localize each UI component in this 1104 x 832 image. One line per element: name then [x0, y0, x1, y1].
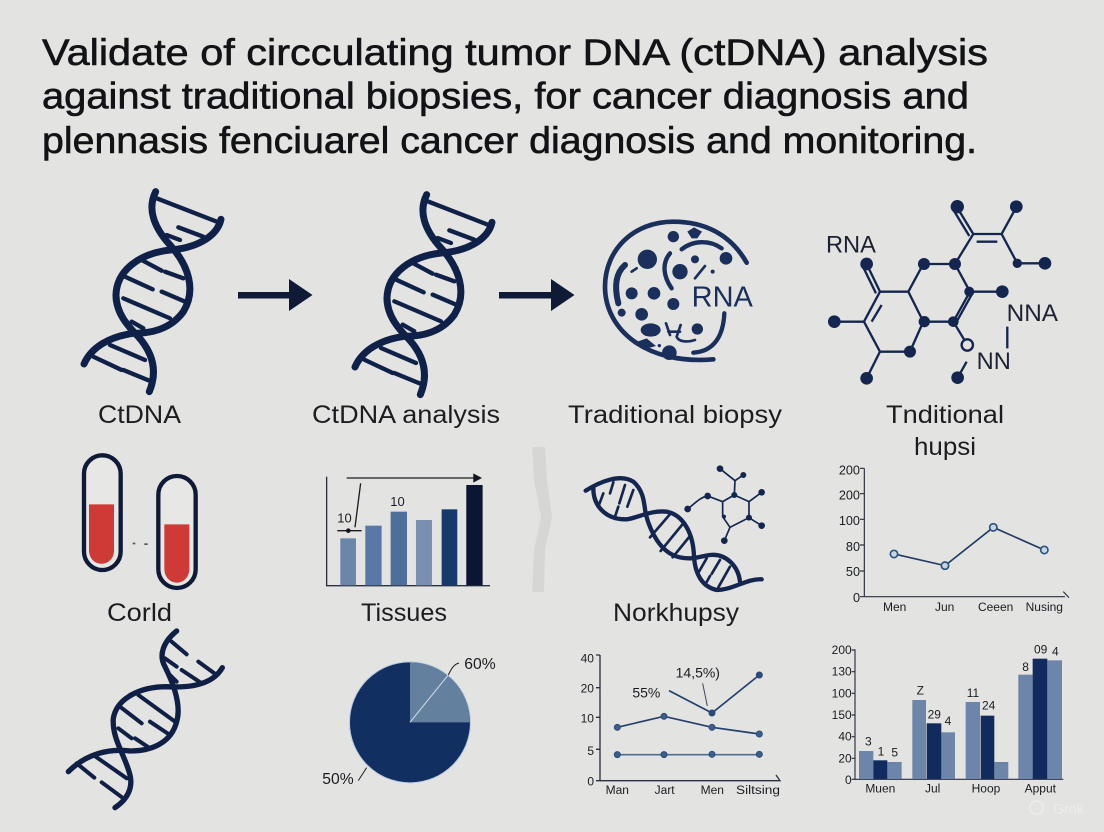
x labels: Jart [655, 783, 675, 797]
y labels: 5 [587, 744, 594, 758]
label: CtDNA: CtDNA [98, 401, 181, 429]
bar chart: tissues: 10 [390, 494, 405, 509]
y labels: 150 [832, 708, 852, 722]
y labels: 0 [845, 773, 852, 787]
y labels [581, 652, 594, 788]
series lines [617, 675, 759, 755]
y labels: 20 [838, 751, 852, 765]
axis labels: 0 [853, 591, 860, 605]
axis labels [839, 463, 860, 605]
y labels: 40 [581, 652, 594, 666]
data line [894, 527, 1044, 566]
bar chart: tissues: 10 [337, 511, 352, 526]
icon: blood tubes [84, 455, 196, 588]
pie chart [322, 656, 496, 788]
label: Corld: Corld [107, 599, 172, 627]
y labels: 200 [832, 643, 852, 657]
month labels: Nusing [1026, 600, 1063, 614]
label: Tnditional hupsi: Tnditional [886, 401, 1004, 429]
title [42, 32, 988, 161]
y labels: 0 [587, 774, 594, 788]
label: RNA: RNA [826, 233, 876, 259]
label: Norkhupsy: Norkhupsy [613, 599, 740, 627]
label: NN: NN [977, 349, 1011, 375]
month labels: Ceeen [978, 600, 1013, 614]
value labels [865, 643, 1059, 760]
line chart: multi series [581, 652, 780, 797]
value labels: Z [917, 684, 924, 698]
y labels: 40 [838, 730, 852, 744]
callout: 14,5%): 14,5%) [676, 664, 720, 680]
label: CtDNA analysis: CtDNA analysis [312, 401, 500, 429]
axis labels: 50 [846, 565, 860, 579]
value labels: 5 [891, 746, 898, 760]
value labels: 1 [878, 744, 885, 758]
axis labels: 200 [839, 489, 860, 503]
decorative chevron ribbon [532, 447, 552, 592]
value labels: 8 [1022, 660, 1029, 674]
x labels [865, 782, 1057, 796]
title: against traditional biopsies, for cancer diagnosis and [42, 76, 969, 116]
axis labels: 100 [839, 514, 860, 528]
icon: DNA helix ctDNA [84, 192, 221, 392]
x labels: Men [701, 783, 724, 797]
label: 60%: 60% [464, 656, 496, 673]
x labels: Man [606, 783, 629, 797]
label: 50%: 50% [322, 771, 354, 788]
line chart: monthly [839, 463, 1069, 614]
value labels: 09 [1034, 643, 1048, 657]
icon: molecule structure [826, 200, 1059, 385]
value labels: 4 [945, 714, 952, 728]
watermark [1030, 800, 1085, 816]
value labels: 24 [982, 698, 996, 712]
label: RNA in cell: RNA [692, 282, 754, 314]
month labels: Jun [935, 600, 954, 614]
label: NNA: NNA [1007, 300, 1059, 327]
watermark: Grok [1053, 800, 1085, 816]
x labels: Siltsing [736, 783, 780, 797]
value labels: 3 [865, 734, 872, 748]
x labels: Hoop [972, 782, 1001, 796]
icon: DNA with molecule [586, 465, 765, 590]
label: Tnditional hupsi: hupsi [914, 433, 976, 461]
x labels: Muen [865, 782, 895, 796]
y labels: 130 [832, 665, 852, 679]
title: Validate of circculating tumor DNA (ctDNA) analysis [42, 32, 988, 73]
icon: DNA helix lower [68, 631, 222, 808]
value labels: 29 [928, 707, 941, 721]
label: Tissues: Tissues [361, 599, 447, 627]
title: plennasis fenciuarel cancer diagnosis and monitoring. [42, 120, 977, 161]
y labels: 10 [581, 712, 594, 726]
x labels [606, 783, 780, 797]
icon: DNA helix analysis [355, 195, 492, 395]
month labels [883, 600, 1063, 614]
icon: cell with RNA [605, 222, 754, 360]
bars [859, 660, 1062, 779]
label: Traditional biopsy: Traditional biopsy [568, 401, 783, 429]
arrow: ctDNA to analysis [238, 279, 312, 311]
axis labels: 80 [846, 540, 860, 554]
axis labels: 200 [839, 463, 860, 477]
x labels: Jul [925, 782, 940, 796]
month labels: Men [883, 600, 906, 614]
x labels: Apput [1025, 782, 1057, 796]
arrow: analysis to biopsy [499, 279, 574, 311]
value labels: 4 [1052, 645, 1059, 659]
y labels: 100 [832, 686, 852, 700]
label: Tnditional hupsi [886, 401, 1004, 461]
bar chart: grouped [832, 643, 1085, 816]
callout: 55%: 55% [632, 684, 660, 700]
bar chart: tissues [327, 473, 490, 586]
y labels [832, 643, 852, 787]
y labels: 20 [581, 682, 594, 696]
value labels: 11 [967, 686, 980, 700]
